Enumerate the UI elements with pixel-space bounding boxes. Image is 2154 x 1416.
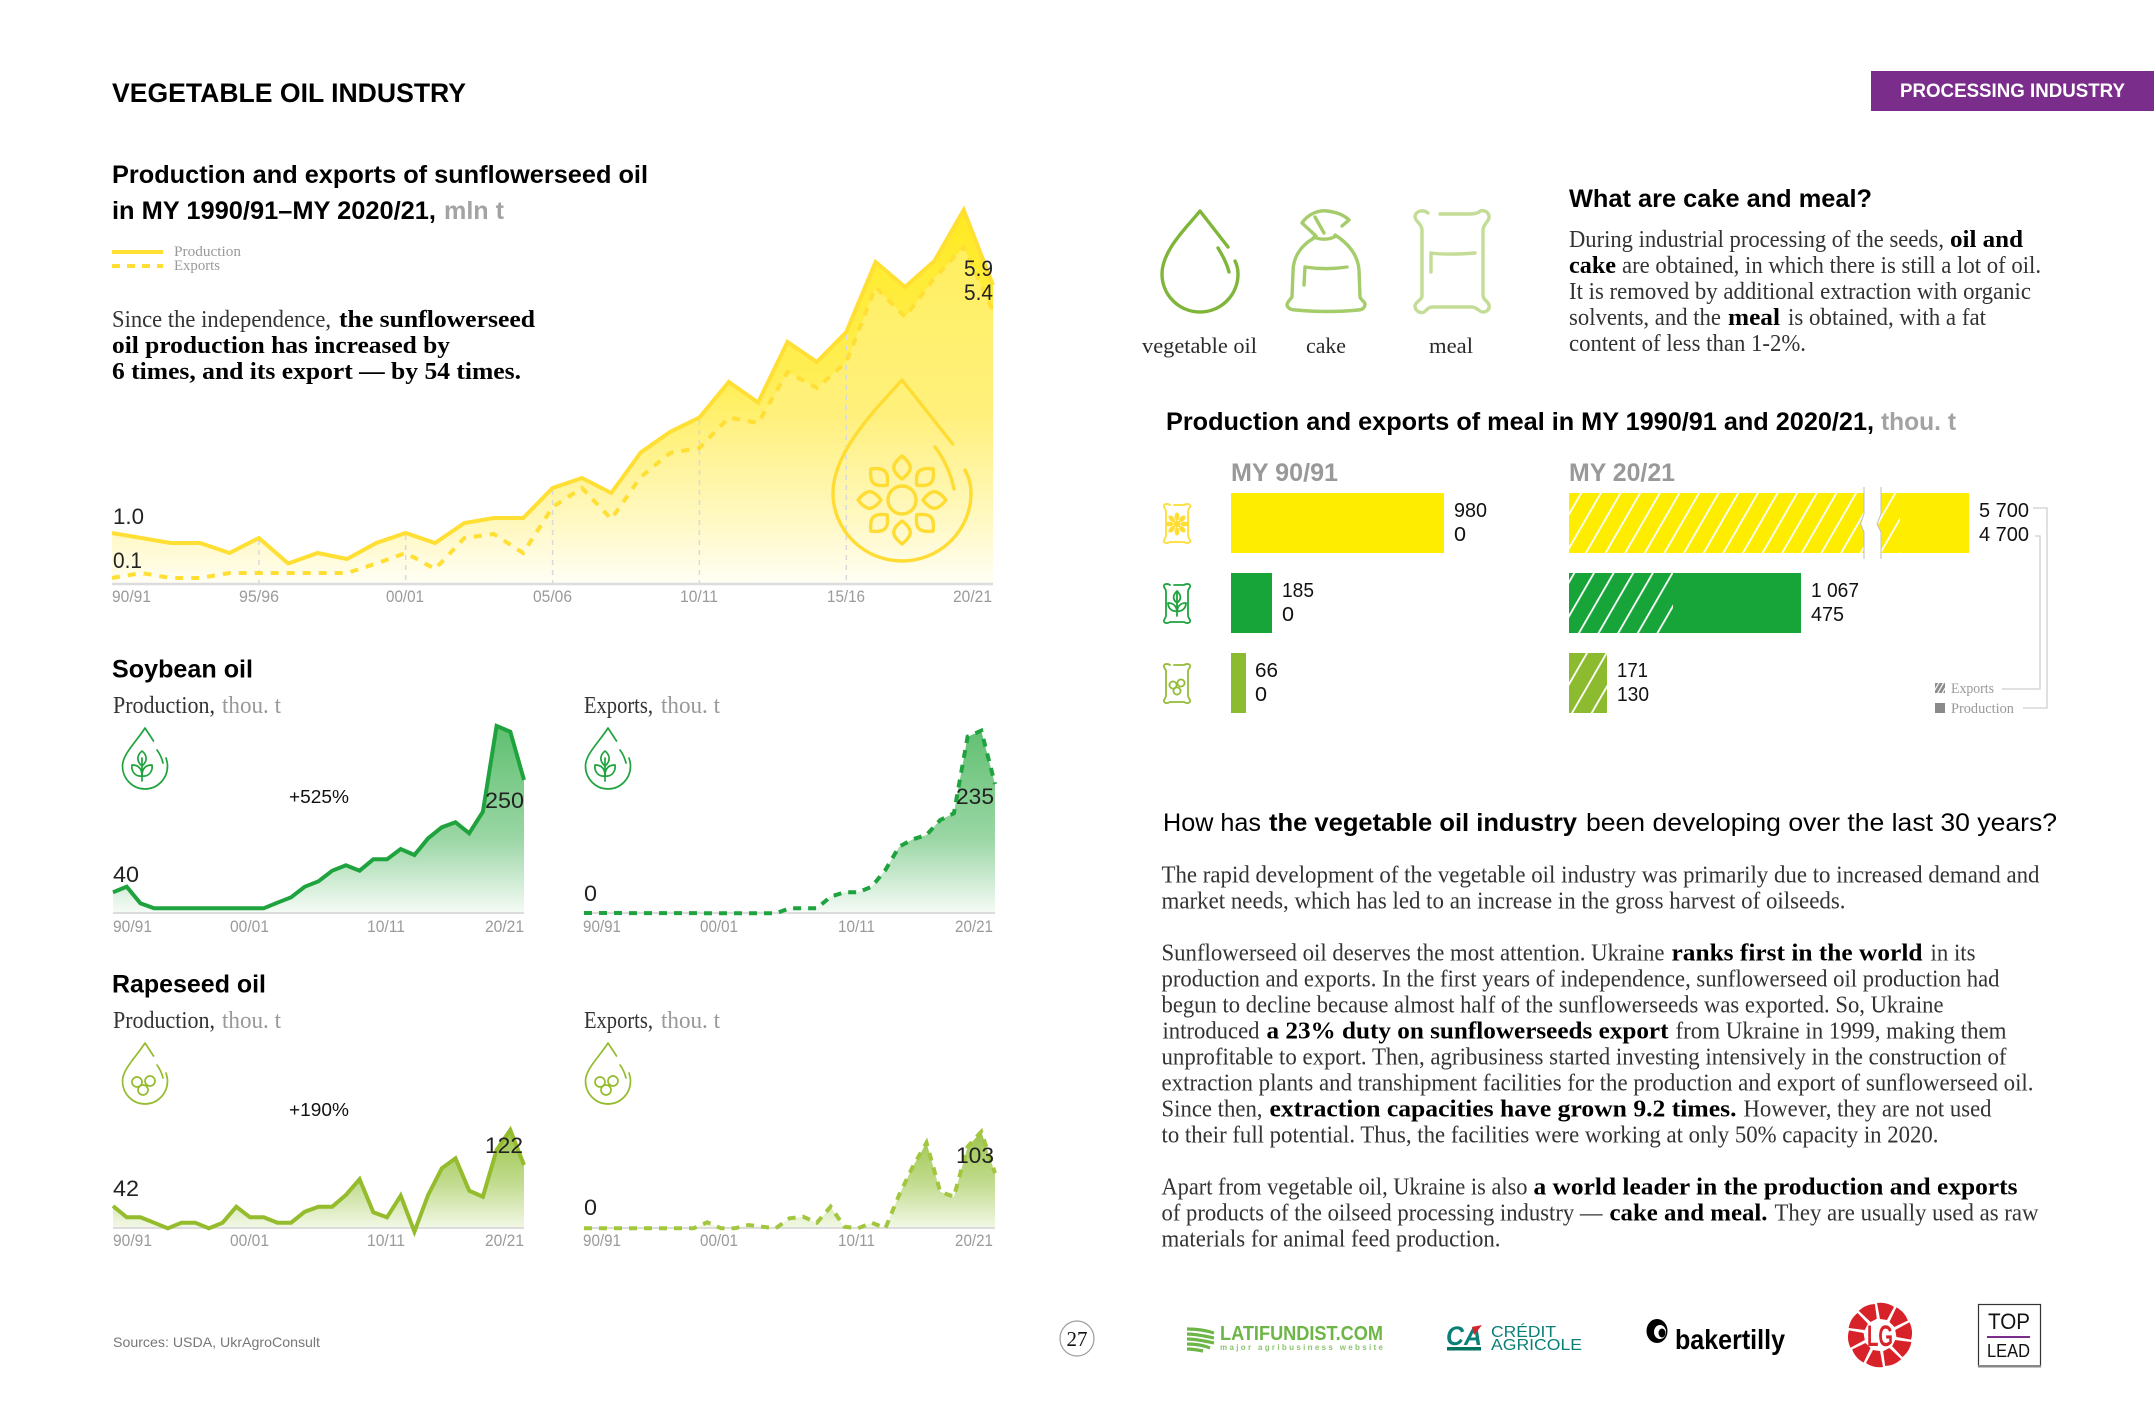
bars: MY 90/91: 980 <box>1454 500 1487 522</box>
icon: sunflower meal bag <box>1164 504 1190 543</box>
bars: MY 90/91: 0 <box>1454 524 1466 546</box>
axis labels: 00/01 <box>386 587 424 606</box>
bars: MY 20/21 <box>1569 487 2029 713</box>
value labels <box>113 256 993 573</box>
chart heading: thou. t <box>1881 408 1957 436</box>
legend: Production <box>174 244 241 260</box>
chart: soybean exports: thou. t <box>661 692 720 719</box>
icon: rapeseed drop <box>586 1043 630 1104</box>
axis labels: 15/16 <box>827 587 865 606</box>
panel: soybean oil <box>112 656 995 936</box>
logo: Credit Agricole <box>1446 1321 1582 1354</box>
column headings: MY 90/91 <box>1231 459 1338 487</box>
chart: rapeseed production <box>113 1007 524 1250</box>
icon: rapeseed meal bag <box>1164 664 1190 703</box>
text block: what are cake and meal: oil and <box>1950 226 2023 253</box>
chart: rapeseed exports: Exports, <box>584 1007 653 1034</box>
bars: MY 90/91: 185 <box>1282 580 1314 602</box>
text block: what are cake and meal: What are cake and meal? <box>1569 185 1872 213</box>
text block: what are cake and meal: meal <box>1728 304 1780 331</box>
area chart: production and exports <box>112 210 993 606</box>
chart: rapeseed production: thou. t <box>222 1007 281 1034</box>
legend: Exports <box>174 258 220 274</box>
subheading: been developing over the last 30 years? <box>1586 809 2057 837</box>
paragraph 3: of products of the oilseed processing industry — <box>1162 1200 1603 1227</box>
axis labels: 05/06 <box>533 587 572 606</box>
bars: MY 20/21: 475 <box>1811 604 1844 626</box>
logo: LG: LG <box>1867 1320 1893 1353</box>
text block: what are cake and meal: are obtained, in which there is still a lot of oil. <box>1622 252 2041 279</box>
paragraph 2: However, they are not used <box>1744 1096 1992 1123</box>
key takeaway text: oil production has increased by <box>112 332 451 359</box>
value labels: 0.1 <box>113 548 142 573</box>
text block: what are cake and meal: content of less than 1-2%. <box>1569 330 1806 357</box>
paragraph 2: a 23% duty on sunflowerseeds export <box>1266 1018 1669 1045</box>
bars: MY 20/21: 1 067 <box>1811 580 1859 602</box>
chart: soybean exports: 235 <box>956 784 994 809</box>
logo: LG <box>1845 1301 1915 1369</box>
icon: vegetable oil: vegetable oil <box>1142 333 1257 358</box>
panel: sunflowerseed oil chart <box>112 161 993 606</box>
paragraph 2: in its <box>1930 940 1976 967</box>
paragraph 3: materials for animal feed production. <box>1162 1226 1500 1253</box>
chart: soybean exports: 10/11 <box>838 917 875 936</box>
paragraph 1 <box>1162 862 2040 915</box>
bars: MY 90/91 <box>1231 493 1487 713</box>
legend with bracket lines: Production <box>1951 701 2014 717</box>
text block: how has the industry developed <box>1162 809 2057 1253</box>
value labels: 1.0 <box>113 504 144 529</box>
logo: Top Lead: LEAD <box>1987 1341 2030 1361</box>
value labels: 5.9 <box>964 256 993 281</box>
section tab: processing industry <box>1871 71 2154 111</box>
key takeaway text <box>112 306 535 385</box>
chart: rapeseed exports: 00/01 <box>700 1231 738 1250</box>
icon: cake <box>1287 211 1365 358</box>
subheading <box>1163 809 2057 837</box>
chart: rapeseed production: 90/91 <box>113 1231 152 1250</box>
icon: soybean drop <box>122 728 168 789</box>
paragraph 2: ranks first in the world <box>1672 940 1923 967</box>
chart: rapeseed exports: thou. t <box>661 1007 720 1034</box>
logo: Baker Tilly: bakertilly <box>1675 1324 1785 1355</box>
chart: soybean exports: 00/01 <box>700 917 738 936</box>
title: VEGETABLE OIL INDUSTRY <box>112 78 466 108</box>
logo: Credit Agricole: CA <box>1446 1321 1482 1351</box>
logo: Baker Tilly <box>1646 1319 1785 1355</box>
paragraph 2: Sunflowerseed oil deserves the most attention. Ukraine <box>1162 940 1665 967</box>
chart: soybean production <box>113 692 524 936</box>
axis labels: 10/11 <box>680 587 718 606</box>
heading: Soybean oil <box>112 656 253 684</box>
chart heading: mln t <box>444 197 505 225</box>
chart: rapeseed exports: 90/91 <box>583 1231 621 1250</box>
text block: what are cake and meal: solvents, and the <box>1569 304 1721 331</box>
chart: soybean exports: Exports, <box>584 692 653 719</box>
chart: soybean exports <box>583 692 995 936</box>
chart: rapeseed production: 10/11 <box>367 1231 405 1250</box>
chart heading: in MY 1990/91–MY 2020/21, <box>112 197 436 225</box>
chart: rapeseed exports: 0 <box>584 1195 597 1220</box>
column headings <box>1231 459 1675 487</box>
icon: cake: cake <box>1306 333 1346 358</box>
text block: what are cake and meal: It is removed by additional extraction with organic <box>1569 278 2031 305</box>
paragraph 1: The rapid development of the vegetable oil industry was primarily due to increased demand and <box>1162 862 2040 889</box>
chart: rapeseed production: 42 <box>113 1176 139 1201</box>
logo: Latifundist: major agribusiness website <box>1220 1343 1384 1352</box>
chart: soybean production: thou. t <box>222 692 281 719</box>
chart: soybean production: 10/11 <box>367 917 405 936</box>
axis labels <box>112 587 992 606</box>
chart: soybean exports: 90/91 <box>583 917 621 936</box>
chart heading <box>112 161 648 225</box>
panel: product icons <box>1142 211 1489 358</box>
chart: rapeseed exports <box>583 1007 995 1250</box>
paragraph 2: begun to decline because almost half of the sunflowerseeds was exported. So, Ukraine <box>1162 992 1944 1019</box>
subheading: How has <box>1163 809 1261 837</box>
bars: MY 20/21: 5 700 <box>1979 500 2029 522</box>
chart: soybean production: 20/21 <box>485 917 524 936</box>
source note: Sources: USDA, UkrAgroConsult <box>113 1334 320 1350</box>
paragraph 3: cake and meal. <box>1610 1200 1768 1227</box>
legend <box>112 244 241 274</box>
paragraph 2: extraction plants and transhipment facilities for the production and export of sunflowerseed oil. <box>1162 1070 2034 1097</box>
chart: soybean production: 00/01 <box>230 917 269 936</box>
chart: rapeseed exports: 20/21 <box>955 1231 993 1250</box>
paragraph 3: They are usually used as raw <box>1774 1200 2039 1227</box>
bars: MY 20/21: 4 700 <box>1979 524 2029 546</box>
page number: 27 <box>1066 1327 1088 1351</box>
paragraph 2: introduced <box>1162 1018 1260 1045</box>
bars: MY 20/21: 130 <box>1617 684 1649 706</box>
bars: MY 90/91: 66 <box>1255 660 1278 682</box>
logo: Latifundist <box>1187 1323 1384 1352</box>
icon: sunflower oil drop <box>833 380 971 561</box>
paragraph 2: Since then, <box>1162 1096 1262 1123</box>
bars: MY 90/91: 0 <box>1282 604 1294 626</box>
logo: Top Lead <box>1978 1304 2041 1368</box>
chart: soybean production: 40 <box>113 862 139 887</box>
page number <box>1060 1321 1094 1356</box>
key takeaway text: 6 times, and its export — by 54 times. <box>112 358 521 385</box>
key takeaway text: the sunflowerseed <box>339 306 535 333</box>
chart: soybean exports: 20/21 <box>955 917 993 936</box>
chart: rapeseed production: 122 <box>485 1133 523 1158</box>
chart: soybean production: 250 <box>485 788 524 813</box>
icon: rapeseed drop <box>122 1043 168 1104</box>
column headings: MY 20/21 <box>1569 459 1675 487</box>
logo: Latifundist: LATIFUNDIST.COM <box>1220 1323 1383 1345</box>
chart: soybean production: +525% <box>289 787 349 807</box>
text block: what are cake and meal: During industrial processing of the seeds, <box>1569 226 1944 253</box>
legend with bracket lines: Exports <box>1951 681 1994 697</box>
chart heading: Production and exports of meal in MY 1990/91 and 2020/21, <box>1166 408 1874 436</box>
chart: rapeseed production: 20/21 <box>485 1231 524 1250</box>
heading: Rapeseed oil <box>112 970 266 998</box>
paragraph 2: from Ukraine in 1999, making them <box>1676 1018 2006 1045</box>
paragraph 2: extraction capacities have grown 9.2 times. <box>1270 1096 1736 1123</box>
legend with bracket lines <box>1935 508 2047 717</box>
chart: rapeseed production: +190% <box>289 1100 349 1120</box>
paragraph 2: unprofitable to export. Then, agribusiness started investing intensively in the construction of <box>1162 1044 2007 1071</box>
subheading: the vegetable oil industry <box>1269 809 1577 837</box>
paragraph 2: to their full potential. Thus, the facilities were working at only 50% capacity in 2020. <box>1162 1122 1938 1149</box>
icon: meal: meal <box>1429 333 1473 358</box>
text block: what are cake and meal: is obtained, with a fat <box>1788 304 1986 331</box>
value labels: 5.4 <box>964 280 993 305</box>
chart: soybean production: 90/91 <box>113 917 152 936</box>
axis labels: 90/91 <box>112 587 151 606</box>
paragraph 3 <box>1162 1174 2039 1253</box>
text block: what are cake and meal: cake <box>1569 252 1616 279</box>
logo: Credit Agricole: CRÉDIT <box>1491 1322 1556 1341</box>
bars: MY 90/91: 0 <box>1255 684 1267 706</box>
icon: meal <box>1415 211 1489 358</box>
chart: rapeseed production: 00/01 <box>230 1231 269 1250</box>
bars: MY 20/21: 171 <box>1617 660 1648 682</box>
key takeaway text: Since the independence, <box>112 306 331 333</box>
chart: soybean exports: 0 <box>584 881 597 906</box>
chart: rapeseed production: Production, <box>113 1007 215 1034</box>
icon: soybean drop <box>586 728 630 789</box>
logo: Credit Agricole: AGRICOLE <box>1491 1337 1582 1354</box>
section tab: processing industry: PROCESSING INDUSTRY <box>1900 81 2125 102</box>
paragraph 3: a world leader in the production and exports <box>1534 1174 2018 1201</box>
paragraph 2 <box>1162 940 2034 1149</box>
icon: vegetable oil <box>1142 211 1257 358</box>
icon: soybean meal bag <box>1164 584 1190 623</box>
logo: Top Lead: TOP <box>1988 1309 2030 1334</box>
chart: rapeseed exports: 103 <box>956 1143 994 1168</box>
chart: rapeseed exports: 10/11 <box>838 1231 875 1250</box>
panel: rapeseed oil <box>112 970 995 1250</box>
paragraph 1: market needs, which has led to an increase in the gross harvest of oilseeds. <box>1162 888 1846 915</box>
axis labels: 95/96 <box>239 587 279 606</box>
chart: soybean production: Production, <box>113 692 215 719</box>
text block: what are cake and meal <box>1569 185 2041 357</box>
axis labels: 20/21 <box>953 587 992 606</box>
chart heading: Production and exports of sunflowerseed oil <box>112 161 648 189</box>
paragraph 3: Apart from vegetable oil, Ukraine is also <box>1162 1174 1528 1201</box>
paragraph 2: production and exports. In the first years of independence, sunflowerseed oil production had <box>1162 966 2000 993</box>
panel: meal bar chart <box>1164 408 2047 717</box>
